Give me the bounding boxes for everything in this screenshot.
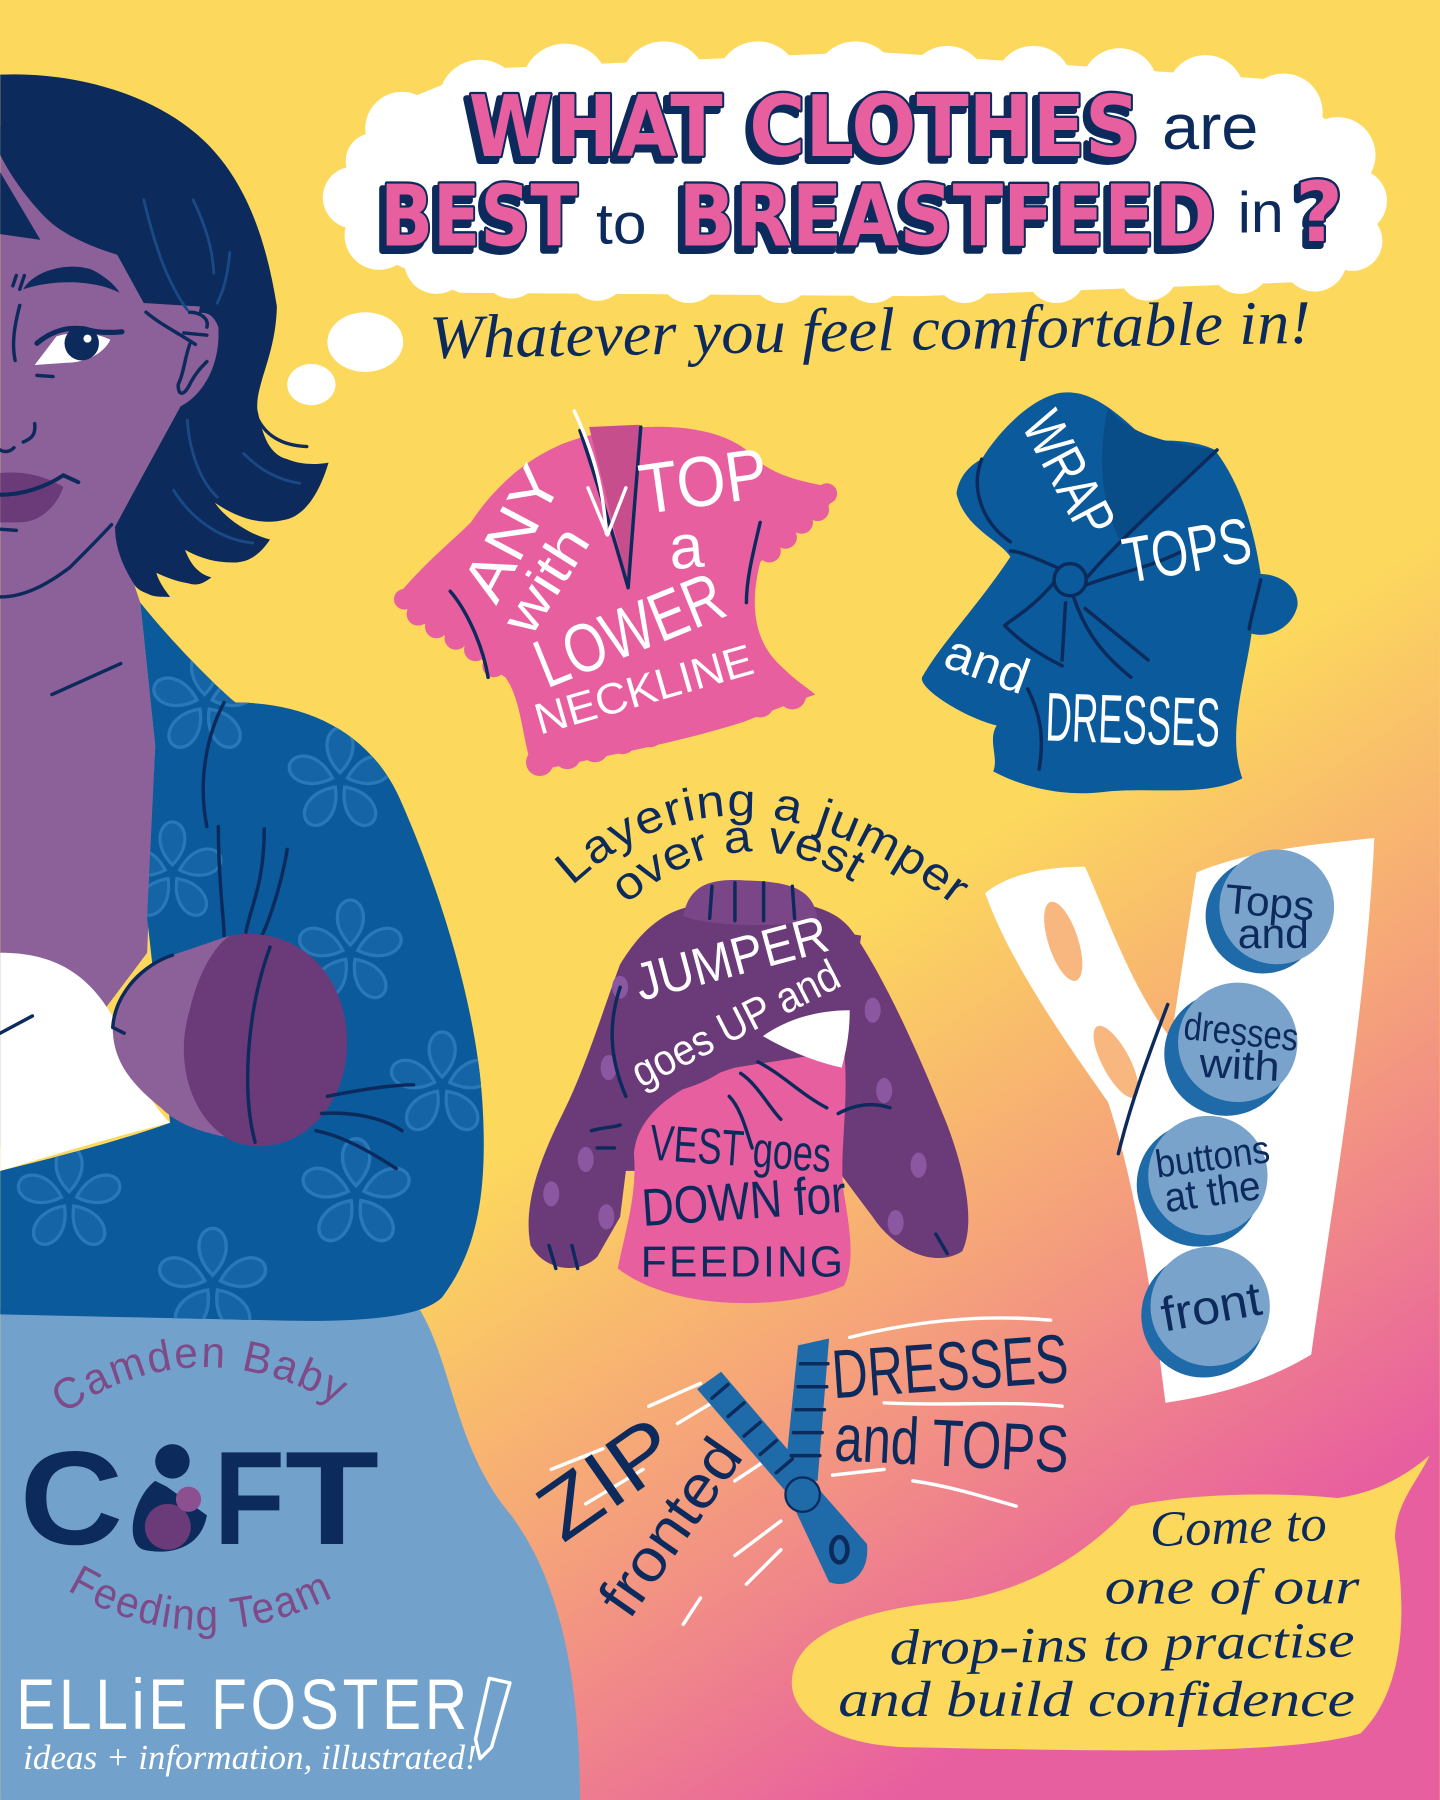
jumper and vest: goes UP and <box>624 951 848 1097</box>
jumper and vest: JUMPER <box>629 905 835 1013</box>
eyebrow <box>23 267 120 293</box>
collar <box>683 880 818 925</box>
zip fronted clothing: and TOPS <box>833 1401 1071 1487</box>
zip fronted clothing: fronted <box>585 1425 755 1628</box>
jumper and vest: FEEDING <box>641 1239 845 1287</box>
illustration: breastfeeding mother <box>0 74 580 1800</box>
pink top: lower neckline <box>394 411 837 776</box>
speech bubble: Come to <box>1149 1495 1328 1557</box>
blue wrap dress: and <box>938 623 1037 705</box>
nose, cheek and jaw lines <box>0 305 112 597</box>
button: front <box>1141 1247 1270 1378</box>
title text: WHAT CLOTHES <box>469 78 1140 177</box>
skirt <box>0 1309 580 1800</box>
button: dresses with <box>1164 983 1300 1116</box>
baby blanket <box>0 953 170 1171</box>
face <box>0 267 219 597</box>
jumper and vest <box>529 880 968 1303</box>
title text: BEST <box>380 168 578 267</box>
zip fronted clothing: ZIP <box>520 1398 693 1559</box>
logo: Camden Baby CoFT Feeding Team: Camden Baby <box>54 1338 348 1408</box>
title text: in <box>1238 181 1284 245</box>
sleeves and body <box>529 907 968 1268</box>
title text <box>376 78 1343 271</box>
pink top: lower neckline: NECKLINE <box>529 636 759 744</box>
artist signature: ideas + information, illustrated! <box>23 1739 477 1777</box>
jumper and vest: DOWN for <box>640 1165 848 1238</box>
jumper lifted panel <box>618 930 861 1096</box>
title text: BEST <box>376 172 573 271</box>
speech bubble: one of our <box>1105 1559 1360 1615</box>
pink top: lower neckline: ANY <box>448 454 575 612</box>
title text: BREASTFEED <box>674 172 1211 271</box>
vest <box>618 1050 851 1303</box>
jumper and vest: VEST goes <box>648 1114 833 1183</box>
blue wrap dress <box>922 392 1298 793</box>
lips <box>0 473 63 522</box>
button: buttons at the <box>1137 1116 1272 1247</box>
pink top: lower neckline: TOP <box>634 434 773 530</box>
logo: Camden Baby CoFT Feeding Team: C <box>20 1424 123 1573</box>
artist signature: ELLiE FOSTER <box>16 1666 471 1745</box>
button: tops and <box>1206 849 1334 973</box>
button: front: front <box>1157 1272 1266 1342</box>
blue wrap dress: TOPS <box>1117 504 1257 597</box>
subtitle: Whatever you feel comfortable in! <box>429 289 1311 372</box>
button: dresses with: with <box>1197 1040 1281 1090</box>
button: tops and: and <box>1238 911 1309 957</box>
logo: Camden Baby CoFT Feeding Team: T <box>285 1424 379 1573</box>
button: dresses with: dresses <box>1182 1005 1300 1060</box>
thought cloud with title <box>287 41 1387 405</box>
button: buttons at the: at the <box>1161 1162 1263 1221</box>
pink top: lower neckline: with <box>490 516 602 646</box>
motion lines <box>551 1318 1062 1624</box>
hair <box>0 74 329 597</box>
speech bubble <box>792 1456 1429 1750</box>
eye <box>35 333 110 365</box>
title text: WHAT CLOTHES <box>464 83 1136 182</box>
blue wrap dress: WRAP <box>1009 401 1128 547</box>
top: blue wrap sleeve <box>0 603 496 1336</box>
ear <box>172 313 219 406</box>
skin: face, neck and chest <box>0 126 230 1148</box>
pink top: lower neckline: LOWER <box>523 557 735 703</box>
button: buttons at the: buttons <box>1153 1128 1272 1187</box>
arrow: points to neckline <box>574 411 626 535</box>
button: tops and: Tops <box>1223 876 1316 929</box>
title text: ? <box>1292 170 1340 266</box>
title text: are <box>1162 91 1258 163</box>
pink top: lower neckline: a <box>666 512 707 583</box>
speech bubble: and build confidence <box>838 1671 1355 1727</box>
thought bubbles <box>287 312 403 405</box>
baby head <box>113 934 413 1169</box>
title text: to <box>596 192 647 256</box>
zip fronted clothing: DRESSES <box>829 1320 1071 1413</box>
blue wrap dress: DRESSES <box>1044 678 1221 762</box>
zip fronted clothing <box>520 1318 1071 1628</box>
logo: Camden Baby CoFT Feeding Team <box>20 1338 379 1640</box>
cloud shape <box>323 41 1387 303</box>
title text: BREASTFEED <box>679 168 1216 267</box>
logo: Camden Baby CoFT Feeding Team: Feeding Team <box>70 1566 331 1640</box>
button placket Y <box>985 838 1374 1403</box>
logo: Camden Baby CoFT Feeding Team: F <box>214 1424 285 1573</box>
artist signature <box>16 1666 510 1777</box>
layering heading: over a vest <box>616 828 865 900</box>
icon: pencil <box>475 1678 510 1759</box>
layering heading: Layering a jumper <box>554 788 968 900</box>
speech bubble: drop-ins to practise <box>889 1611 1355 1676</box>
zipper <box>697 1339 867 1584</box>
title text: ? <box>1295 165 1343 261</box>
